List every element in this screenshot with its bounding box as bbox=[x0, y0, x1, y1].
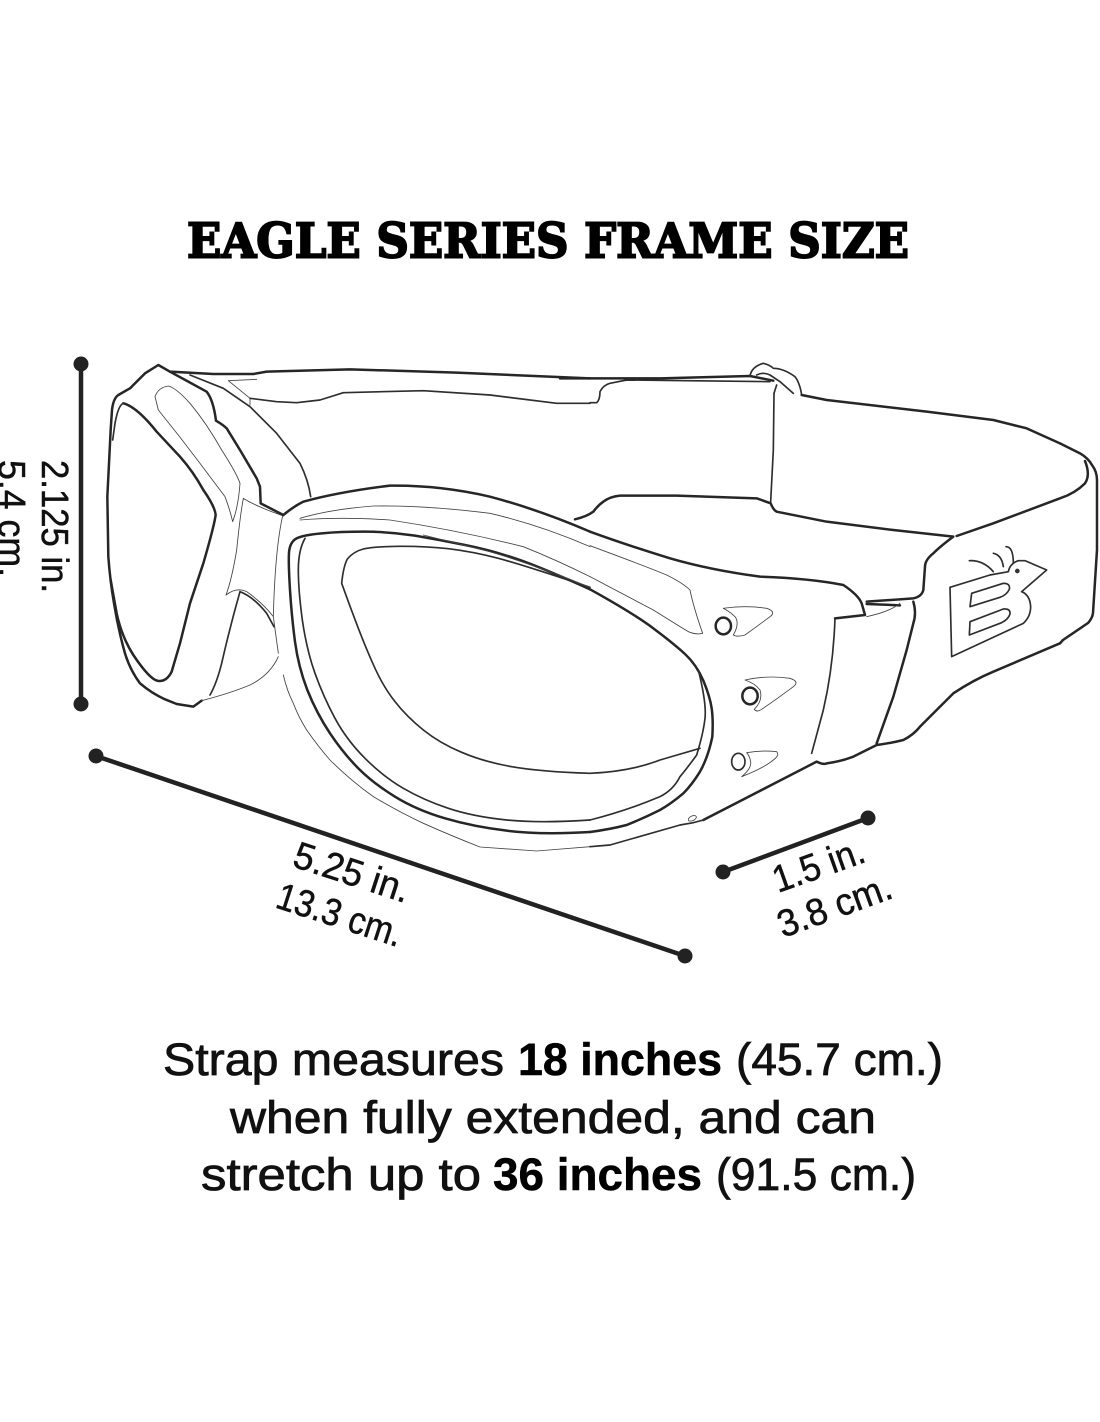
dimension: width: 13.3 cm. bbox=[271, 876, 408, 956]
strap measurement text: 18 inches bbox=[518, 1034, 722, 1085]
strap measurement text bbox=[163, 1034, 943, 1200]
title: EAGLE SERIES FRAME SIZE bbox=[187, 214, 909, 270]
vent rivets bbox=[716, 607, 796, 777]
main lens frame, left half bbox=[283, 486, 590, 532]
strap buckle bbox=[750, 363, 802, 395]
main lens frame, right half bbox=[590, 589, 713, 832]
strap measurement text: stretch up to bbox=[201, 1149, 481, 1200]
strap measurement text: when fully extended, and can bbox=[229, 1092, 876, 1143]
brand logo: bird B bbox=[950, 547, 1047, 657]
dimension: depth: 3.8 cm. bbox=[772, 866, 898, 946]
small frame screw hole bbox=[687, 814, 697, 822]
strap measurement text: 36 inches bbox=[493, 1149, 702, 1200]
dimension: depth: 1.5 in. bbox=[767, 830, 871, 901]
strap measurement text: (91.5 cm.) bbox=[716, 1149, 916, 1200]
goggles line drawing bbox=[107, 363, 1097, 851]
strap measurement text: Strap measures bbox=[163, 1034, 504, 1085]
left lens and temple bbox=[107, 365, 590, 851]
dimension: depth bbox=[716, 810, 898, 946]
dimension: height bbox=[0, 356, 88, 712]
dimension: height: 2.125 in. bbox=[33, 460, 75, 593]
dimension: width bbox=[88, 748, 692, 964]
strap and right side of frame bbox=[560, 363, 1097, 847]
strap measurement text: (45.7 cm.) bbox=[736, 1034, 943, 1085]
dimension: width: 5.25 in. bbox=[288, 835, 415, 912]
